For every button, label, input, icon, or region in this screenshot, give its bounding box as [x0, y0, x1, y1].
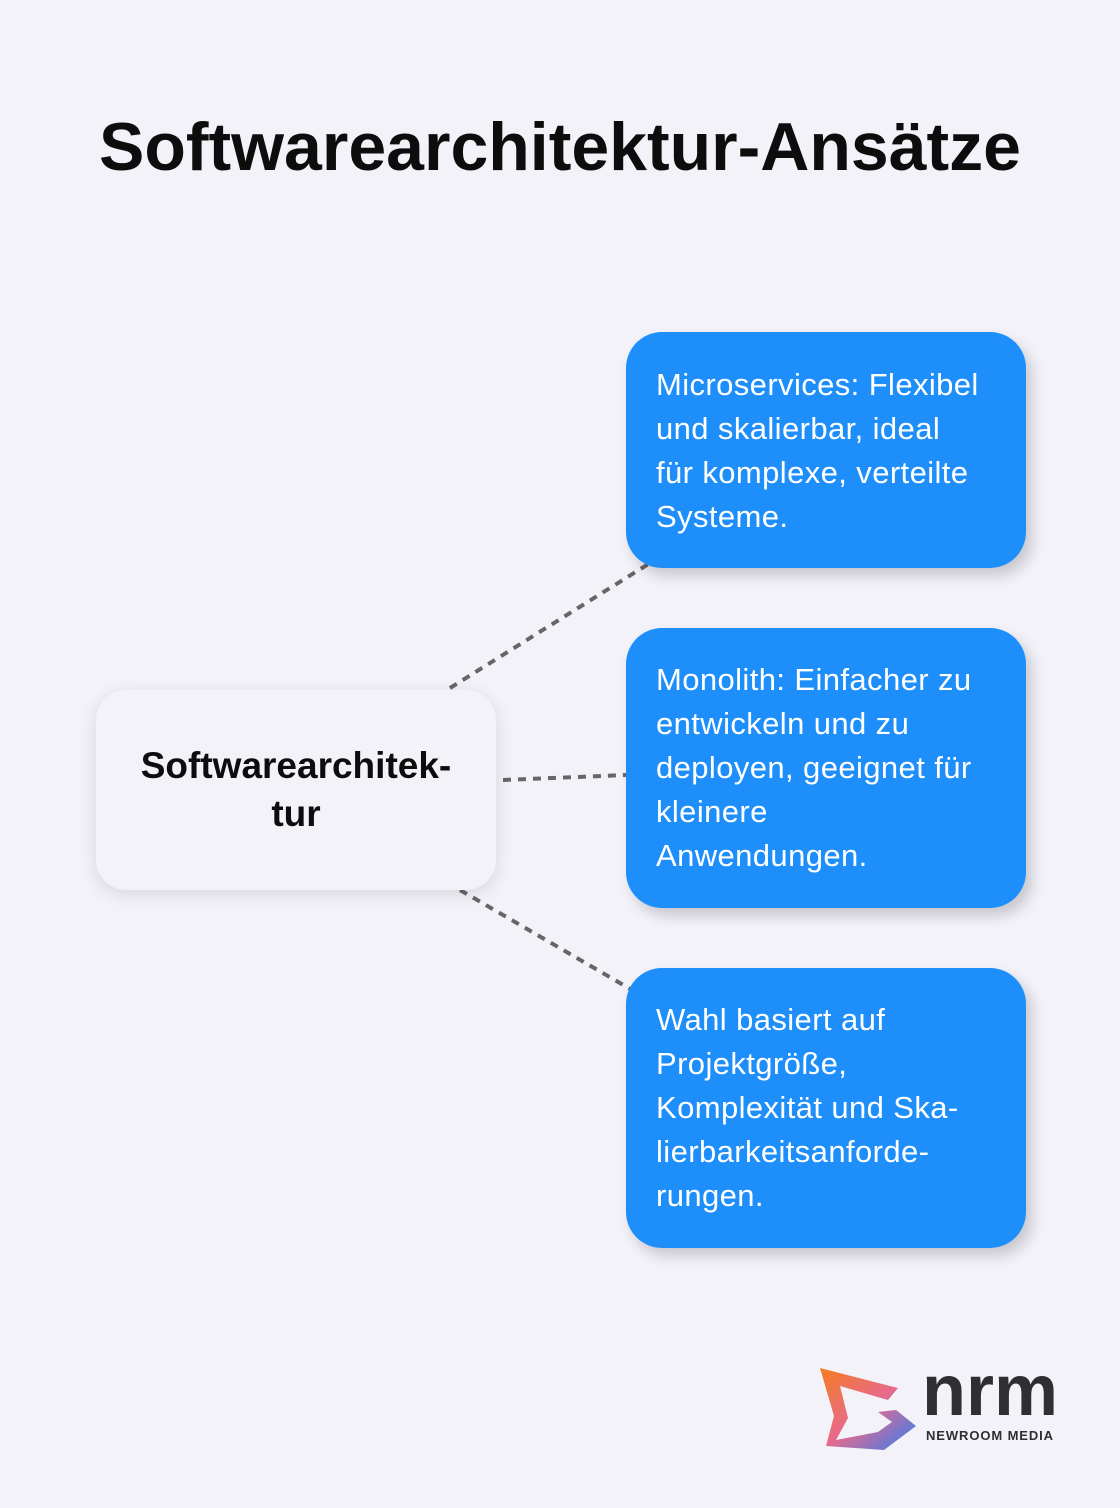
box: microservices	[626, 332, 1026, 568]
box: monolith: deployen, geeignet für	[656, 750, 972, 785]
box: microservices: und skalierbar, ideal	[656, 411, 940, 446]
box: choice: Komplexität und Ska-	[656, 1090, 959, 1125]
center node	[96, 690, 496, 890]
logo: NEWROOM MEDIA	[926, 1428, 1054, 1443]
box: microservices: für komplexe, verteilte	[656, 455, 968, 490]
center node: Softwarearchitek-	[141, 745, 451, 786]
box: monolith: Monolith: Einfacher zu	[656, 662, 972, 697]
box: monolith: kleinere	[656, 794, 768, 829]
box: choice: Wahl basiert auf	[656, 1002, 885, 1037]
box: microservices: Microservices: Flexibel	[656, 367, 979, 402]
center node: tur	[271, 793, 321, 834]
box: choice	[626, 968, 1026, 1248]
box: monolith: entwickeln und zu	[656, 706, 909, 741]
logo	[820, 1351, 1058, 1450]
logo: nrm	[922, 1351, 1058, 1431]
box: choice: rungen.	[656, 1178, 764, 1213]
box: microservices: Systeme.	[656, 499, 788, 534]
title: Softwarearchitektur-Ansätze	[99, 109, 1021, 185]
box: choice: Projektgröße,	[656, 1046, 847, 1081]
box: monolith	[626, 628, 1026, 908]
box: monolith: Anwendungen.	[656, 838, 868, 873]
box: choice: lierbarkeitsanforde-	[656, 1134, 929, 1169]
